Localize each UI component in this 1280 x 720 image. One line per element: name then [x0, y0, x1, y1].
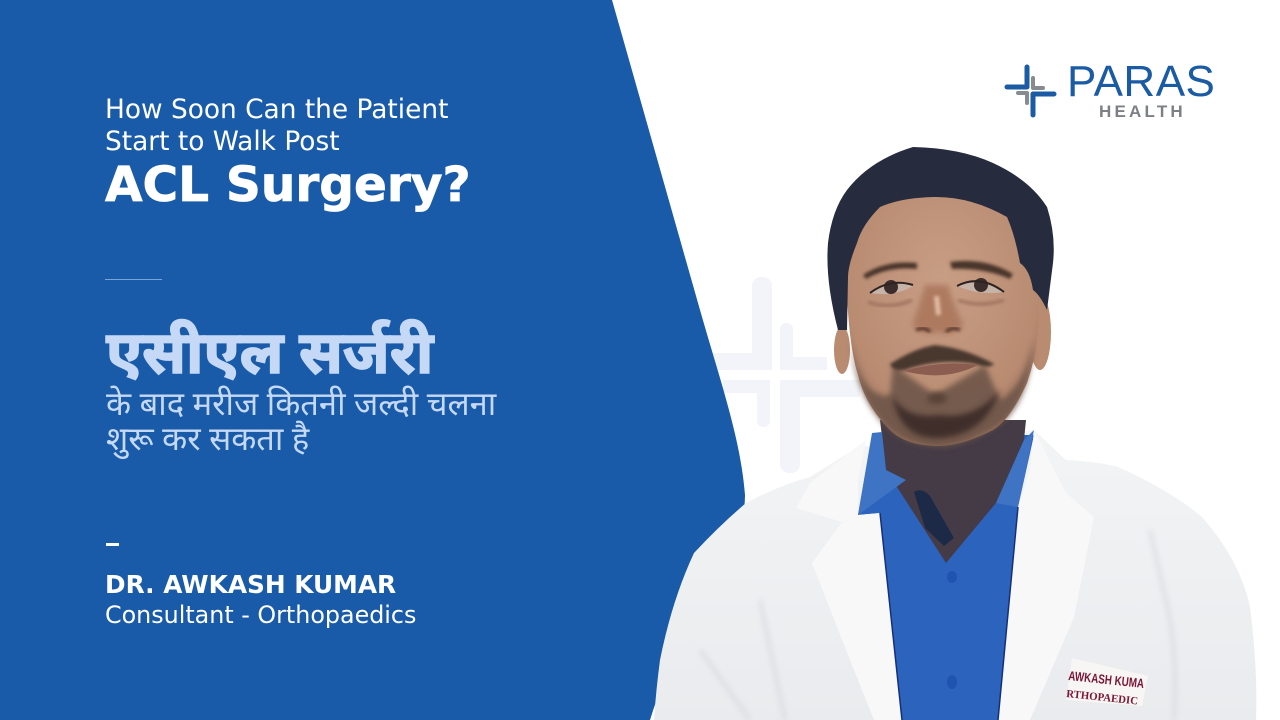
lab coat	[654, 430, 1256, 720]
name badge: RTHOPAEDIC	[1066, 688, 1139, 708]
eyes and brows	[863, 261, 1013, 306]
shirt collar left	[858, 432, 906, 515]
name badge	[1066, 658, 1148, 708]
logo wordmark: PARAS	[1067, 57, 1215, 106]
logo subtext: HEALTH	[1099, 102, 1186, 121]
mouth	[904, 363, 978, 375]
divider	[105, 279, 162, 280]
ears	[834, 294, 1051, 374]
shirt edge lines	[880, 507, 1018, 720]
logo icon	[1004, 64, 1056, 118]
heading english	[104, 94, 471, 213]
heading line 1: How Soon Can the Patient	[105, 94, 448, 125]
microphone	[914, 490, 954, 546]
nose	[912, 285, 964, 334]
dash accent	[106, 543, 119, 546]
heading line 2: Start to Walk Post	[105, 126, 340, 157]
blue shirt	[858, 435, 1034, 720]
hindi subheading: शुरू कर सकता है	[106, 422, 309, 464]
hindi heading: एसीएल सर्जरी	[106, 321, 433, 398]
coat shading	[700, 530, 1175, 720]
neck	[880, 420, 1026, 563]
heading acl surgery: ACL Surgery?	[105, 157, 471, 213]
soul patch	[927, 392, 947, 404]
shirt collar right	[996, 430, 1034, 507]
doctor name: DR. AWKASH KUMAR	[105, 570, 396, 599]
moustache	[890, 345, 994, 370]
doctor role: Consultant - Orthopaedics	[105, 601, 416, 629]
hair	[827, 147, 1054, 330]
face	[845, 185, 1039, 446]
coat lapel right	[998, 430, 1094, 720]
goatee	[892, 390, 1000, 438]
hindi subheading: के बाद मरीज कितनी जल्दी चलना	[106, 387, 496, 429]
coat lapel left	[796, 440, 902, 720]
logo	[1004, 57, 1215, 121]
hindi subheading	[106, 386, 497, 464]
name badge: AWKASH KUMA	[1068, 668, 1145, 691]
beard	[850, 340, 1034, 447]
shirt buttons	[947, 571, 957, 689]
